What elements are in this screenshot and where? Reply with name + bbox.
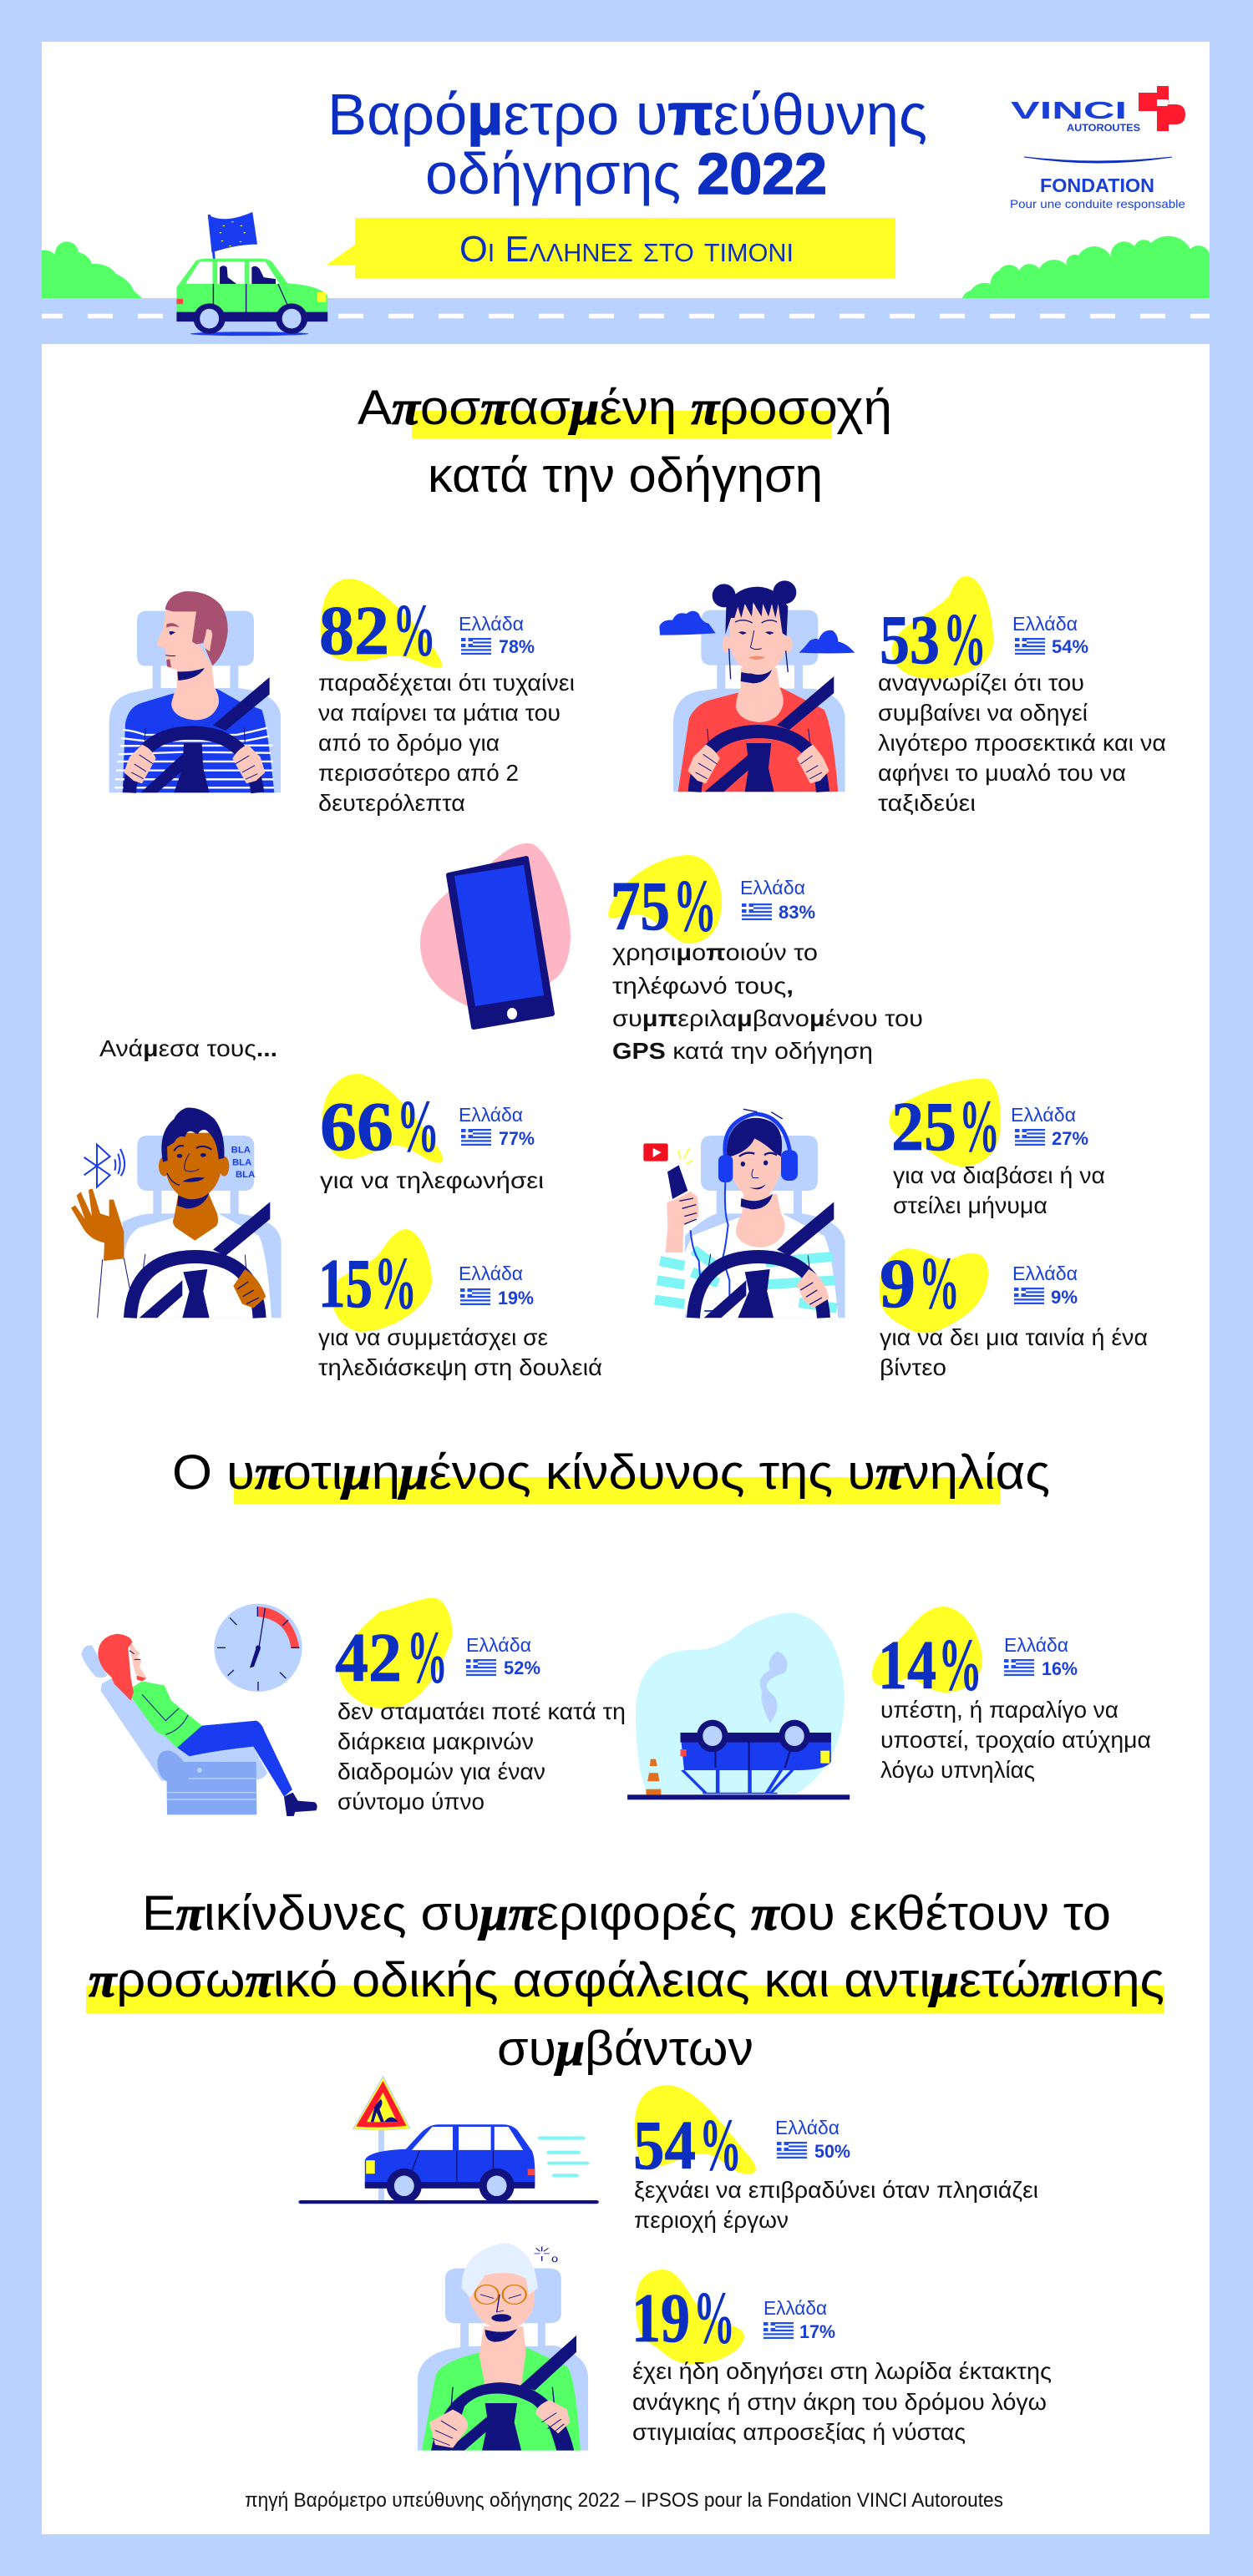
Greece comparison: 16%: [1042, 1658, 1078, 1679]
description: για να συμμετάσχει σε: [318, 1324, 548, 1350]
description: [318, 670, 575, 816]
Greece comparison: Ελλάδα: [1004, 1634, 1068, 1656]
description: συμπεριλαμβανομένου του: [612, 1005, 923, 1031]
number: [335, 1617, 448, 1699]
bluetooth icon: [84, 1145, 124, 1187]
description: [634, 2177, 1038, 2233]
number: 54: [633, 2107, 696, 2184]
blob: [872, 1607, 982, 1693]
description: [318, 1324, 602, 1380]
Greece comparison: 78%: [499, 636, 535, 657]
illustration: man calling with bluetooth: [71, 1107, 282, 1318]
number: %: [374, 1242, 417, 1325]
raised hand: [71, 1188, 124, 1261]
number: %: [393, 590, 436, 672]
headphones: [691, 1114, 798, 1311]
Greece comparison: [775, 2117, 850, 2162]
main panel: [42, 344, 1210, 2534]
description: [893, 1162, 1105, 1218]
title: Βαρόμετρο υπεύθυνης: [327, 82, 927, 147]
blob: [880, 1248, 988, 1333]
bush left: [42, 241, 142, 298]
description: τηλέφωνό τους ,: [612, 973, 794, 999]
bla bla text: [231, 1146, 255, 1180]
description: δεν σταματάει ποτέ κατά τη: [337, 1698, 626, 1724]
subtitle speech bubble: [327, 218, 895, 278]
description: για να δει μια ταινία ή ένα: [880, 1324, 1148, 1350]
blob: [608, 855, 722, 944]
logo: VINCI Autoroutes Fondation: VINCI: [1011, 98, 1127, 124]
description: διαδρομών για έναν: [337, 1759, 545, 1784]
number: 9: [880, 1245, 916, 1323]
heading: distracted attention: Αποσπασμένη προσοχή: [358, 381, 892, 435]
stat: 19%: [632, 2270, 1052, 2445]
stat: 66%: [320, 1074, 544, 1193]
illustration: sleeping woman in seat with clock: [81, 1604, 317, 1816]
illustration: car passing roadworks sign: [299, 2077, 599, 2204]
number: %: [959, 1086, 1000, 1168]
subtitle speech bubble: Οι Ελληνες στο τιμονι: [459, 229, 794, 270]
illustration: overturned car: [627, 1613, 850, 1799]
description: λόγω υπνηλίας: [880, 1757, 1035, 1783]
description: δευτερόλεπτα: [318, 790, 465, 816]
stat: 75%: [608, 855, 923, 1064]
description: έχει ήδη οδηγήσει στη λωρίδα έκτακτης: [632, 2358, 1052, 2384]
number: [319, 590, 436, 672]
number: 82: [319, 592, 389, 670]
number: [878, 1624, 982, 1707]
Greece comparison: [1012, 613, 1088, 657]
number: [632, 2277, 735, 2360]
logo: VINCI Autoroutes Fondation: FONDATION: [1040, 175, 1154, 196]
number: [320, 1086, 439, 1168]
number: [880, 599, 987, 681]
illustration: sleepy older woman driving: [418, 2243, 588, 2451]
number: 15: [318, 1245, 373, 1323]
blob: [636, 2270, 744, 2364]
Greece comparison: [459, 1263, 534, 1308]
number: 14: [878, 1627, 936, 1704]
description: ξεχνάει να επιβραδύνει όταν πλησιάζει: [634, 2177, 1038, 2203]
stat: 25%: [889, 1079, 1105, 1218]
description: διάρκεια μακρινών: [337, 1728, 534, 1754]
youtube icon: [643, 1143, 692, 1164]
illustration: man driving looking away: [109, 591, 281, 792]
description: υποστεί, τροχαίο ατύχημα: [880, 1727, 1151, 1753]
dizzy marks: [535, 2246, 550, 2261]
Greece comparison: Ελλάδα: [1012, 1263, 1078, 1284]
Greece comparison: [740, 877, 815, 923]
description: [880, 1324, 1148, 1380]
number: 53: [880, 601, 940, 679]
number: 42: [335, 1619, 402, 1697]
Greece comparison: 9%: [1051, 1287, 1078, 1308]
logo: VINCI Autoroutes Fondation: AUTOROUTES: [1067, 122, 1140, 134]
Greece comparison: 27%: [1052, 1128, 1088, 1149]
illustration: woman daydreaming with clouds: [659, 580, 855, 792]
description: περιοχή έργων: [634, 2207, 789, 2233]
number: %: [938, 1624, 982, 1707]
description: περισσότερο από 2: [318, 760, 519, 786]
Greece comparison: 52%: [504, 1657, 540, 1678]
Greece comparison: Ελλάδα: [763, 2297, 827, 2319]
blob: [892, 576, 993, 679]
Greece comparison: Ελλάδα: [459, 1263, 523, 1284]
title: οδήγησης 2022: [425, 141, 827, 206]
Greece comparison: Ελλάδα: [1011, 1104, 1076, 1126]
Greece comparison: [1004, 1634, 1078, 1679]
description: ανάγκης ή στην άκρη του δρόμου λόγω: [632, 2389, 1047, 2415]
Greece comparison: Ελλάδα: [466, 1634, 531, 1656]
Greece comparison: Ελλάδα: [740, 877, 805, 898]
description: σύντομο ύπνο: [337, 1789, 484, 1814]
source footer: πηγή Βαρόμετρο υπεύθυνης οδήγησης 2022 – IPSOS pour la Fondation VINCI Autoroutes: [245, 2489, 1003, 2512]
stat: 14%: [872, 1607, 1151, 1783]
Greece comparison: 54%: [1052, 636, 1088, 657]
Greece comparison: [1012, 1263, 1078, 1308]
number: [318, 1242, 417, 1325]
description: αναγνωρίζει ότι του: [878, 670, 1084, 696]
number: [611, 865, 717, 948]
clock: [214, 1604, 302, 1692]
blob: [321, 579, 442, 668]
description: στείλει μήνυμα: [893, 1192, 1048, 1218]
blob: [331, 1229, 432, 1332]
Greece comparison: Ελλάδα: [459, 1104, 523, 1126]
heading: distracted attention: [358, 381, 892, 503]
Greece comparison: Ελλάδα: [775, 2117, 840, 2138]
logo: VINCI Autoroutes Fondation: Pour une conduite responsable: [1010, 197, 1185, 210]
number: %: [699, 2104, 742, 2187]
stat: 82%: [318, 579, 575, 816]
Greece comparison: [459, 613, 535, 657]
stat: 54%: [633, 2085, 1038, 2233]
car with EU flag: [176, 212, 327, 336]
description: [880, 1697, 1151, 1783]
description: συμβαίνει να οδηγεί: [878, 700, 1088, 726]
stat: 9%: [880, 1242, 1148, 1380]
number: %: [693, 2277, 735, 2360]
description: βίντεο: [880, 1354, 946, 1380]
illustration: man with headphones and phone: [643, 1109, 845, 1318]
Greece comparison: 19%: [498, 1288, 534, 1308]
Greece comparison: 17%: [799, 2321, 835, 2342]
blob: [635, 2085, 756, 2174]
description: στιγμιαίας απροσεξίας ή νύστας: [632, 2419, 966, 2445]
description: [612, 939, 923, 1064]
Greece comparison: Ελλάδα: [1012, 613, 1078, 635]
Greece comparison: [459, 1104, 535, 1149]
description: [878, 670, 1166, 816]
heading: dangerous behaviours: συμβάντων: [497, 2022, 753, 2076]
heading: underestimated sleepiness risk: Ο υποτιμημένος κίνδυνος της υ πνηλίας: [172, 1445, 1050, 1500]
number: [880, 1242, 960, 1325]
Greece comparison: 50%: [814, 2141, 850, 2162]
blob: [889, 1079, 1001, 1167]
description: από το δρόμο για: [318, 730, 500, 756]
number: [633, 2104, 742, 2187]
number: %: [943, 599, 987, 681]
Greece comparison: 77%: [499, 1128, 535, 1149]
description: να παίρνει τα μάτια του: [318, 700, 561, 726]
icon: smartphone on pink blob: [420, 843, 571, 1027]
logo: VINCI Autoroutes Fondation: [1010, 86, 1185, 210]
description: λιγότερο προσεκτικά και να: [878, 730, 1166, 756]
number: %: [673, 865, 717, 948]
number: %: [407, 1617, 448, 1699]
number: %: [919, 1242, 960, 1325]
description: υπέστη, ή παραλίγο να: [880, 1697, 1119, 1723]
description: παραδέχεται ότι τυχαίνει: [318, 670, 575, 696]
number: [891, 1086, 1000, 1168]
description: χρησιμοποιούν το: [612, 939, 818, 965]
stat: 42%: [335, 1598, 626, 1814]
header panel: [42, 42, 1210, 298]
blob: [322, 1074, 443, 1163]
description: ταξιδεύει: [878, 790, 976, 816]
description: GPS κατά την οδήγηση: [612, 1038, 873, 1064]
number: %: [397, 1086, 439, 1168]
heading: dangerous behaviours: προσωπικό οδικής ασφάλειας και αντι μετώπισης: [89, 1953, 1164, 2007]
Greece comparison: [1011, 1104, 1088, 1149]
Greece comparison: 83%: [779, 902, 815, 923]
hand with phone: [666, 1192, 699, 1253]
title: [327, 82, 927, 206]
EU flag: [208, 212, 257, 259]
number: 25: [891, 1088, 956, 1166]
description: αφήνει το μυαλό του να: [878, 760, 1126, 786]
Greece comparison: [763, 2297, 835, 2342]
bla bla text: BLA: [232, 1157, 251, 1167]
heading: dangerous behaviours: Επικίνδυνες συ μπεριφορές που εκθέτουν το: [142, 1886, 1111, 1941]
description: για να διαβάσει ή να: [893, 1162, 1105, 1188]
bla bla text: BLA: [236, 1170, 255, 1180]
blob: [339, 1598, 452, 1708]
road: [42, 314, 1210, 318]
traffic cone: [646, 1759, 661, 1794]
description: τηλεδιάσκεψη στη δουλειά: [318, 1354, 602, 1380]
number: 19: [632, 2280, 690, 2357]
bla bla text: BLA: [231, 1146, 251, 1156]
number: 66: [320, 1088, 393, 1166]
stat: 53%: [878, 576, 1166, 816]
heading: distracted attention: κατά την οδήγηση: [428, 448, 823, 503]
Greece comparison: [466, 1634, 540, 1678]
description: [632, 2358, 1052, 2445]
description: για να τηλεφωνήσει: [320, 1167, 544, 1193]
Greece comparison: Ελλάδα: [459, 613, 524, 635]
heading: dangerous behaviours: [86, 1886, 1164, 2076]
number: 75: [611, 868, 670, 945]
description: [337, 1698, 626, 1814]
roadworks sign: [353, 2077, 410, 2200]
stat: 15%: [318, 1229, 602, 1380]
text: among them: Ανάμεσα τους ...: [99, 1035, 277, 1061]
bush right: [962, 236, 1210, 298]
